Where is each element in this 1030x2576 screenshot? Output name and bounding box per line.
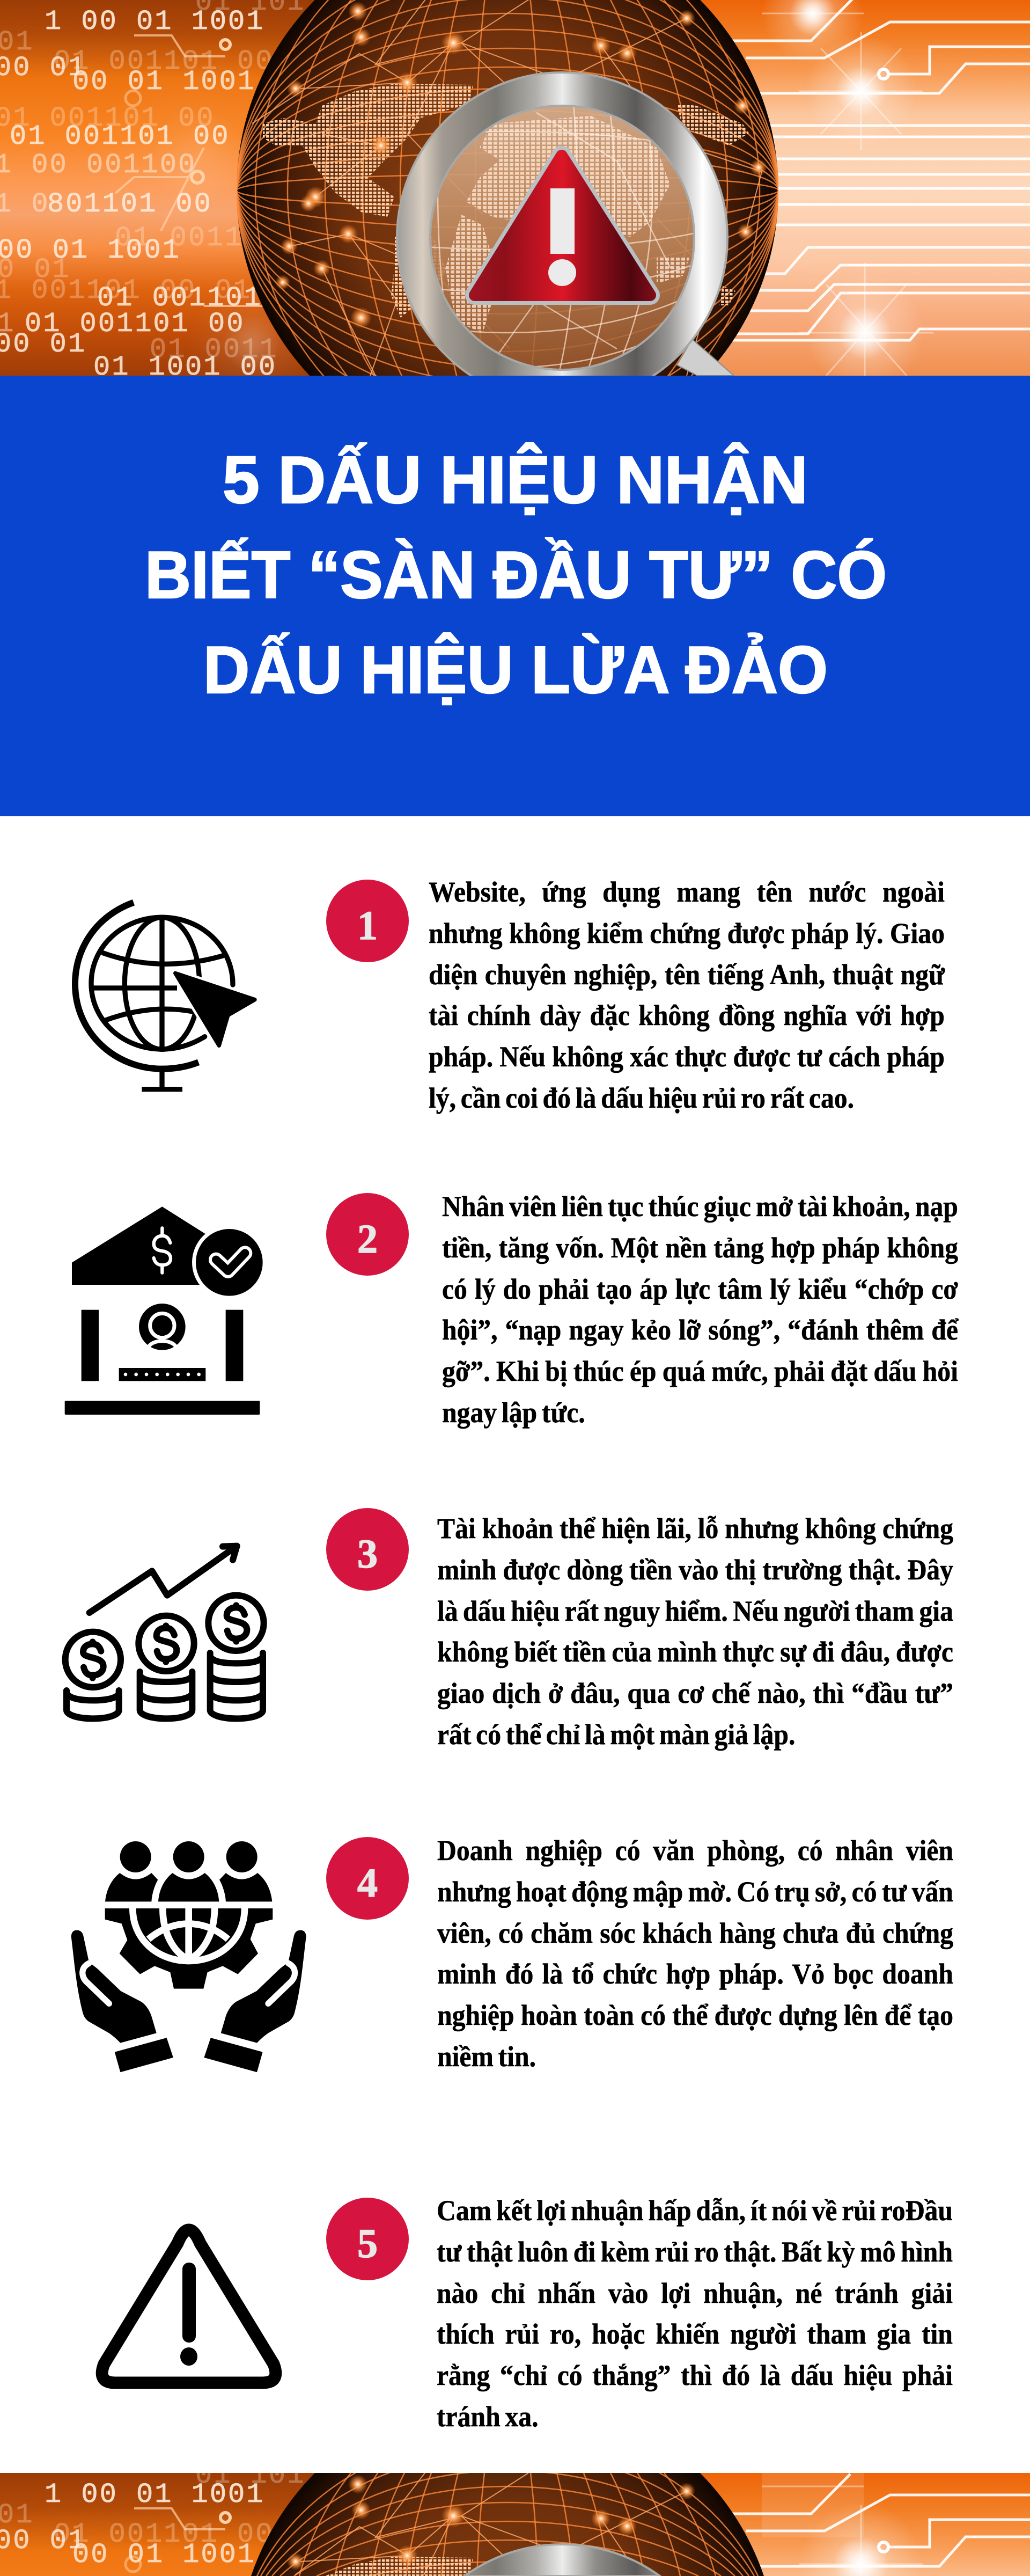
title band — [0, 376, 1030, 816]
footer background with circuit lines — [0, 2473, 1030, 2576]
title: 5 DẤU HIỆU NHẬN — [223, 443, 808, 517]
text block 2: Nhân viên liên tục thúc giục mở tài khoản, nạp — [442, 1190, 958, 1223]
number badge 4: 4 — [357, 1861, 378, 1906]
binary digits on the left of the hero: 01 0011 — [150, 334, 278, 365]
text block 2: hội”, “nạp ngay kẻo lỡ sóng”, “đánh thêm để — [442, 1314, 958, 1346]
panel: sign 3 — [62, 1508, 953, 1751]
binary digits on the left of the hero: 801101 00 — [47, 188, 212, 220]
footer binary digits: 00 01 1001 — [72, 2539, 256, 2571]
text block 4: niềm tin. — [437, 2040, 536, 2073]
text block 4: nhưng hoạt động mập mờ. Có trụ sở, có tư vấn — [437, 1876, 953, 1908]
binary digits on the left of the hero — [0, 0, 305, 383]
text block 4 — [437, 1834, 953, 2073]
title — [145, 443, 887, 707]
binary digits on the left of the hero: 01 001101 00 — [54, 46, 274, 77]
footer binary digits — [0, 2460, 305, 2571]
number badge 3: 3 — [357, 1532, 378, 1577]
text block 2: tiền, tăng vốn. Một nền tảng hợp pháp không — [442, 1232, 958, 1264]
binary digits on the left of the hero: 01 0011 — [115, 222, 243, 254]
title: BIẾT “SÀN ĐẦU TƯ” CÓ — [145, 538, 887, 612]
number badge 5 — [326, 2198, 409, 2280]
text block 1: pháp. Nếu không xác thực được tư cách pháp — [429, 1041, 945, 1073]
text block 3: giao dịch ở đâu, qua cơ chế nào, thì “đầu tư” — [437, 1677, 953, 1709]
text block 3: không biết tiền của mình thực sự đi đâu, được — [437, 1636, 953, 1668]
number badge 5: 5 — [357, 2221, 378, 2266]
text block 4: minh đó là tổ chức hợp pháp. Vỏ bọc doanh — [437, 1958, 953, 1990]
icon: globe with cursor — [72, 899, 257, 1092]
title: DẤU HIỆU LỪA ĐẢO — [203, 633, 828, 707]
text block 4: Doanh nghiệp có văn phòng, có nhân viên — [437, 1834, 953, 1867]
text block 3: rất có thể chỉ là một màn giả lập. — [437, 1718, 795, 1751]
footer binary digits: 1 00 01 1001 — [45, 2479, 264, 2511]
text block 1 — [429, 876, 945, 1114]
binary digits on the left of the hero: 01 001101 — [97, 282, 262, 314]
text block 2: có lý do phải tạo áp lực tâm lý kiểu “chớp cơ — [442, 1273, 958, 1305]
text block 1: Website, ứng dụng mang tên nước ngoài — [429, 876, 945, 908]
text block 5: nào chỉ nhấn vào lợi nhuận, né tránh giải — [437, 2277, 953, 2309]
text block 1: nhưng không kiểm chứng được pháp lý. Giao — [429, 917, 945, 949]
number badge 1 — [326, 880, 409, 962]
binary digits on the left of the hero: 01 001101 00 — [0, 103, 215, 134]
number badge 2 — [326, 1193, 409, 1276]
footer globe and magnifier top — [251, 2433, 764, 2576]
panel: sign 4 — [71, 1834, 953, 2073]
text block 5: Cam kết lợi nhuận hấp dẫn, ít nói về rủi roĐầu — [437, 2194, 953, 2227]
number badge 1: 1 — [357, 903, 378, 948]
number badge 4 — [326, 1837, 409, 1920]
icon: coin stacks with rising arrow — [62, 1542, 267, 1722]
number badge 2: 2 — [357, 1217, 378, 1262]
text block 5: tránh xa. — [437, 2401, 539, 2433]
text block 4: nghiệp hoàn toàn có thể được dựng lên để tạo — [437, 1999, 953, 2031]
binary digits on the left of the hero: 1 00 01 1001 — [45, 6, 264, 38]
icon: people, gear, globe and hands — [71, 1841, 306, 2072]
text block 2 — [442, 1190, 959, 1429]
binary digits on the left of the hero: 1 00 001100 — [0, 149, 196, 181]
panel: sign 1 — [72, 876, 945, 1114]
text block 5 — [437, 2194, 953, 2433]
text block 5: thích rủi ro, hoặc khiến người tham gia tin — [437, 2318, 953, 2350]
text block 2: ngay lập tức. — [442, 1396, 585, 1429]
text block 3: Tài khoản thể hiện lãi, lỗ nhưng không chứng — [437, 1512, 953, 1545]
icon: bank with check mark — [64, 1206, 263, 1415]
icon: warning triangle — [95, 2224, 282, 2389]
text block 1: tài chính dày đặc không đồng nghĩa với hợp — [429, 999, 945, 1031]
footer binary digits: 01 001101 00 — [54, 2519, 274, 2550]
text block 3 — [437, 1512, 953, 1751]
binary digits on the left of the hero: 01 001101 00 — [10, 121, 230, 152]
hero banner: cyber security image — [0, 0, 1030, 376]
number badge 3 — [326, 1508, 409, 1591]
globe, world map, magnifier and warning triangle — [237, 0, 778, 376]
binary digits on the left of the hero: 00 01 1001 — [72, 66, 256, 98]
panel: sign 5 — [95, 2194, 953, 2433]
text block 2: gỡ”. Khi bị thúc ép quá mức, phải đặt dấu hỏi — [442, 1355, 958, 1387]
text block 5: tư thật luôn đi kèm rủi ro thật. Bất kỳ mô hình — [437, 2236, 953, 2268]
hero background with circuit lines — [0, 0, 1030, 408]
text block 1: diện chuyên nghiệp, tên tiếng Anh, thuật ngữ — [429, 958, 945, 991]
binary digits on the left of the hero: 1 001101 00 01 — [0, 275, 252, 306]
text block 1: lý, cần coi đó là dấu hiệu rủi ro rất cao. — [429, 1082, 854, 1114]
panel: sign 2 — [64, 1190, 959, 1429]
text block 4: viên, có chăm sóc khách hàng chưa đủ chứng — [437, 1917, 953, 1949]
text block 3: minh được dòng tiền vào thị trường thật. Đây — [437, 1554, 953, 1586]
text block 5: rằng “chỉ có thắng” thì đó là dấu hiệu phải — [437, 2359, 953, 2391]
binary digits on the left of the hero: 00 01 1001 — [0, 235, 181, 266]
binary digits on the left of the hero: 01 001101 00 — [25, 308, 245, 340]
footer banner: repeated hero image — [0, 2473, 1030, 2576]
text block 3: là dấu hiệu rất nguy hiểm. Nếu người tham gia — [437, 1595, 953, 1627]
